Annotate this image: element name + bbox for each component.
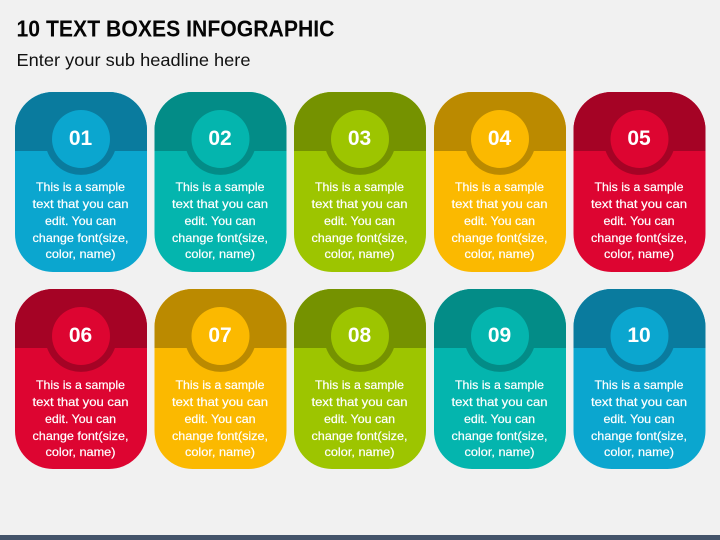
text box 06: color, name)	[46, 445, 116, 459]
text box 01: change font(size,	[32, 231, 129, 245]
text box 05: color, name)	[604, 247, 674, 261]
text box 07	[154, 289, 286, 469]
text box 04: text that you can	[452, 197, 548, 211]
text box 09: color, name)	[464, 445, 535, 459]
text box 02: This is a sample	[176, 180, 265, 194]
text box 03: 03	[348, 127, 371, 150]
text box 06: change font(size,	[32, 429, 129, 443]
text box 02: edit. You can	[184, 214, 256, 228]
text box 07: color, name)	[185, 445, 255, 459]
text box 02: color, name)	[185, 247, 255, 261]
text box 09: change font(size,	[452, 429, 548, 443]
text box 07: text that you can	[172, 395, 268, 409]
text box 10	[574, 289, 706, 469]
text box 03: edit. You can	[324, 214, 395, 228]
text box 05: This is a sample	[594, 180, 684, 194]
text box 06: edit. You can	[45, 412, 116, 426]
text box 07: This is a sample	[176, 378, 265, 392]
text box 04: edit. You can	[464, 214, 535, 228]
text box 01: edit. You can	[45, 214, 116, 228]
subtitle: Enter your sub headline here	[16, 50, 250, 70]
text box 04: 04	[488, 127, 511, 150]
text box 06: 06	[69, 324, 92, 347]
text box 05	[574, 92, 706, 272]
text box 08	[294, 289, 426, 469]
text box 05: change font(size,	[591, 231, 687, 245]
text box 10: This is a sample	[594, 378, 684, 392]
text box 08: text that you can	[312, 395, 408, 409]
text box 02	[154, 92, 286, 272]
text box 09: 09	[488, 324, 511, 347]
text box 03: This is a sample	[315, 180, 404, 194]
text box 06: text that you can	[32, 395, 128, 409]
text box 04: color, name)	[464, 247, 535, 261]
text box 01: color, name)	[46, 247, 116, 261]
text box 10: edit. You can	[604, 412, 674, 426]
text box 09: text that you can	[452, 395, 548, 409]
text box 02: 02	[208, 127, 232, 150]
text box 08: 08	[348, 324, 371, 347]
text box 08: edit. You can	[324, 412, 395, 426]
text box 01: This is a sample	[36, 180, 125, 194]
text box 05: text that you can	[591, 197, 687, 211]
text box 08: color, name)	[324, 445, 395, 459]
text box 08: This is a sample	[315, 378, 404, 392]
text box 08: change font(size,	[312, 429, 408, 443]
text box 02: change font(size,	[172, 231, 268, 245]
text box 03: color, name)	[324, 247, 395, 261]
text box 07: 07	[208, 324, 232, 347]
text box 10: change font(size,	[591, 429, 687, 443]
text box 06: This is a sample	[36, 378, 125, 392]
text box 04: This is a sample	[455, 180, 544, 194]
text box 09: This is a sample	[455, 378, 544, 392]
text box 03: text that you can	[312, 197, 408, 211]
text box 10: color, name)	[604, 445, 674, 459]
text box 09	[434, 289, 566, 469]
text box 07: change font(size,	[172, 429, 268, 443]
text box 09: edit. You can	[464, 412, 535, 426]
text box 01: text that you can	[32, 197, 128, 211]
text box 10: 10	[627, 324, 651, 347]
text box 01	[15, 92, 147, 272]
footer bar	[0, 535, 720, 540]
text box 10: text that you can	[591, 395, 687, 409]
text box 05: edit. You can	[604, 214, 674, 228]
title: 10 TEXT BOXES INFOGRAPHIC	[16, 16, 334, 42]
text box 01: 01	[69, 127, 92, 150]
text box 05: 05	[627, 127, 651, 150]
text box 03	[294, 92, 426, 272]
text box 02: text that you can	[172, 197, 268, 211]
text box 03: change font(size,	[312, 231, 408, 245]
text box 07: edit. You can	[184, 412, 256, 426]
text box 04: change font(size,	[452, 231, 548, 245]
text box 06	[15, 289, 147, 469]
text box 04	[434, 92, 566, 272]
